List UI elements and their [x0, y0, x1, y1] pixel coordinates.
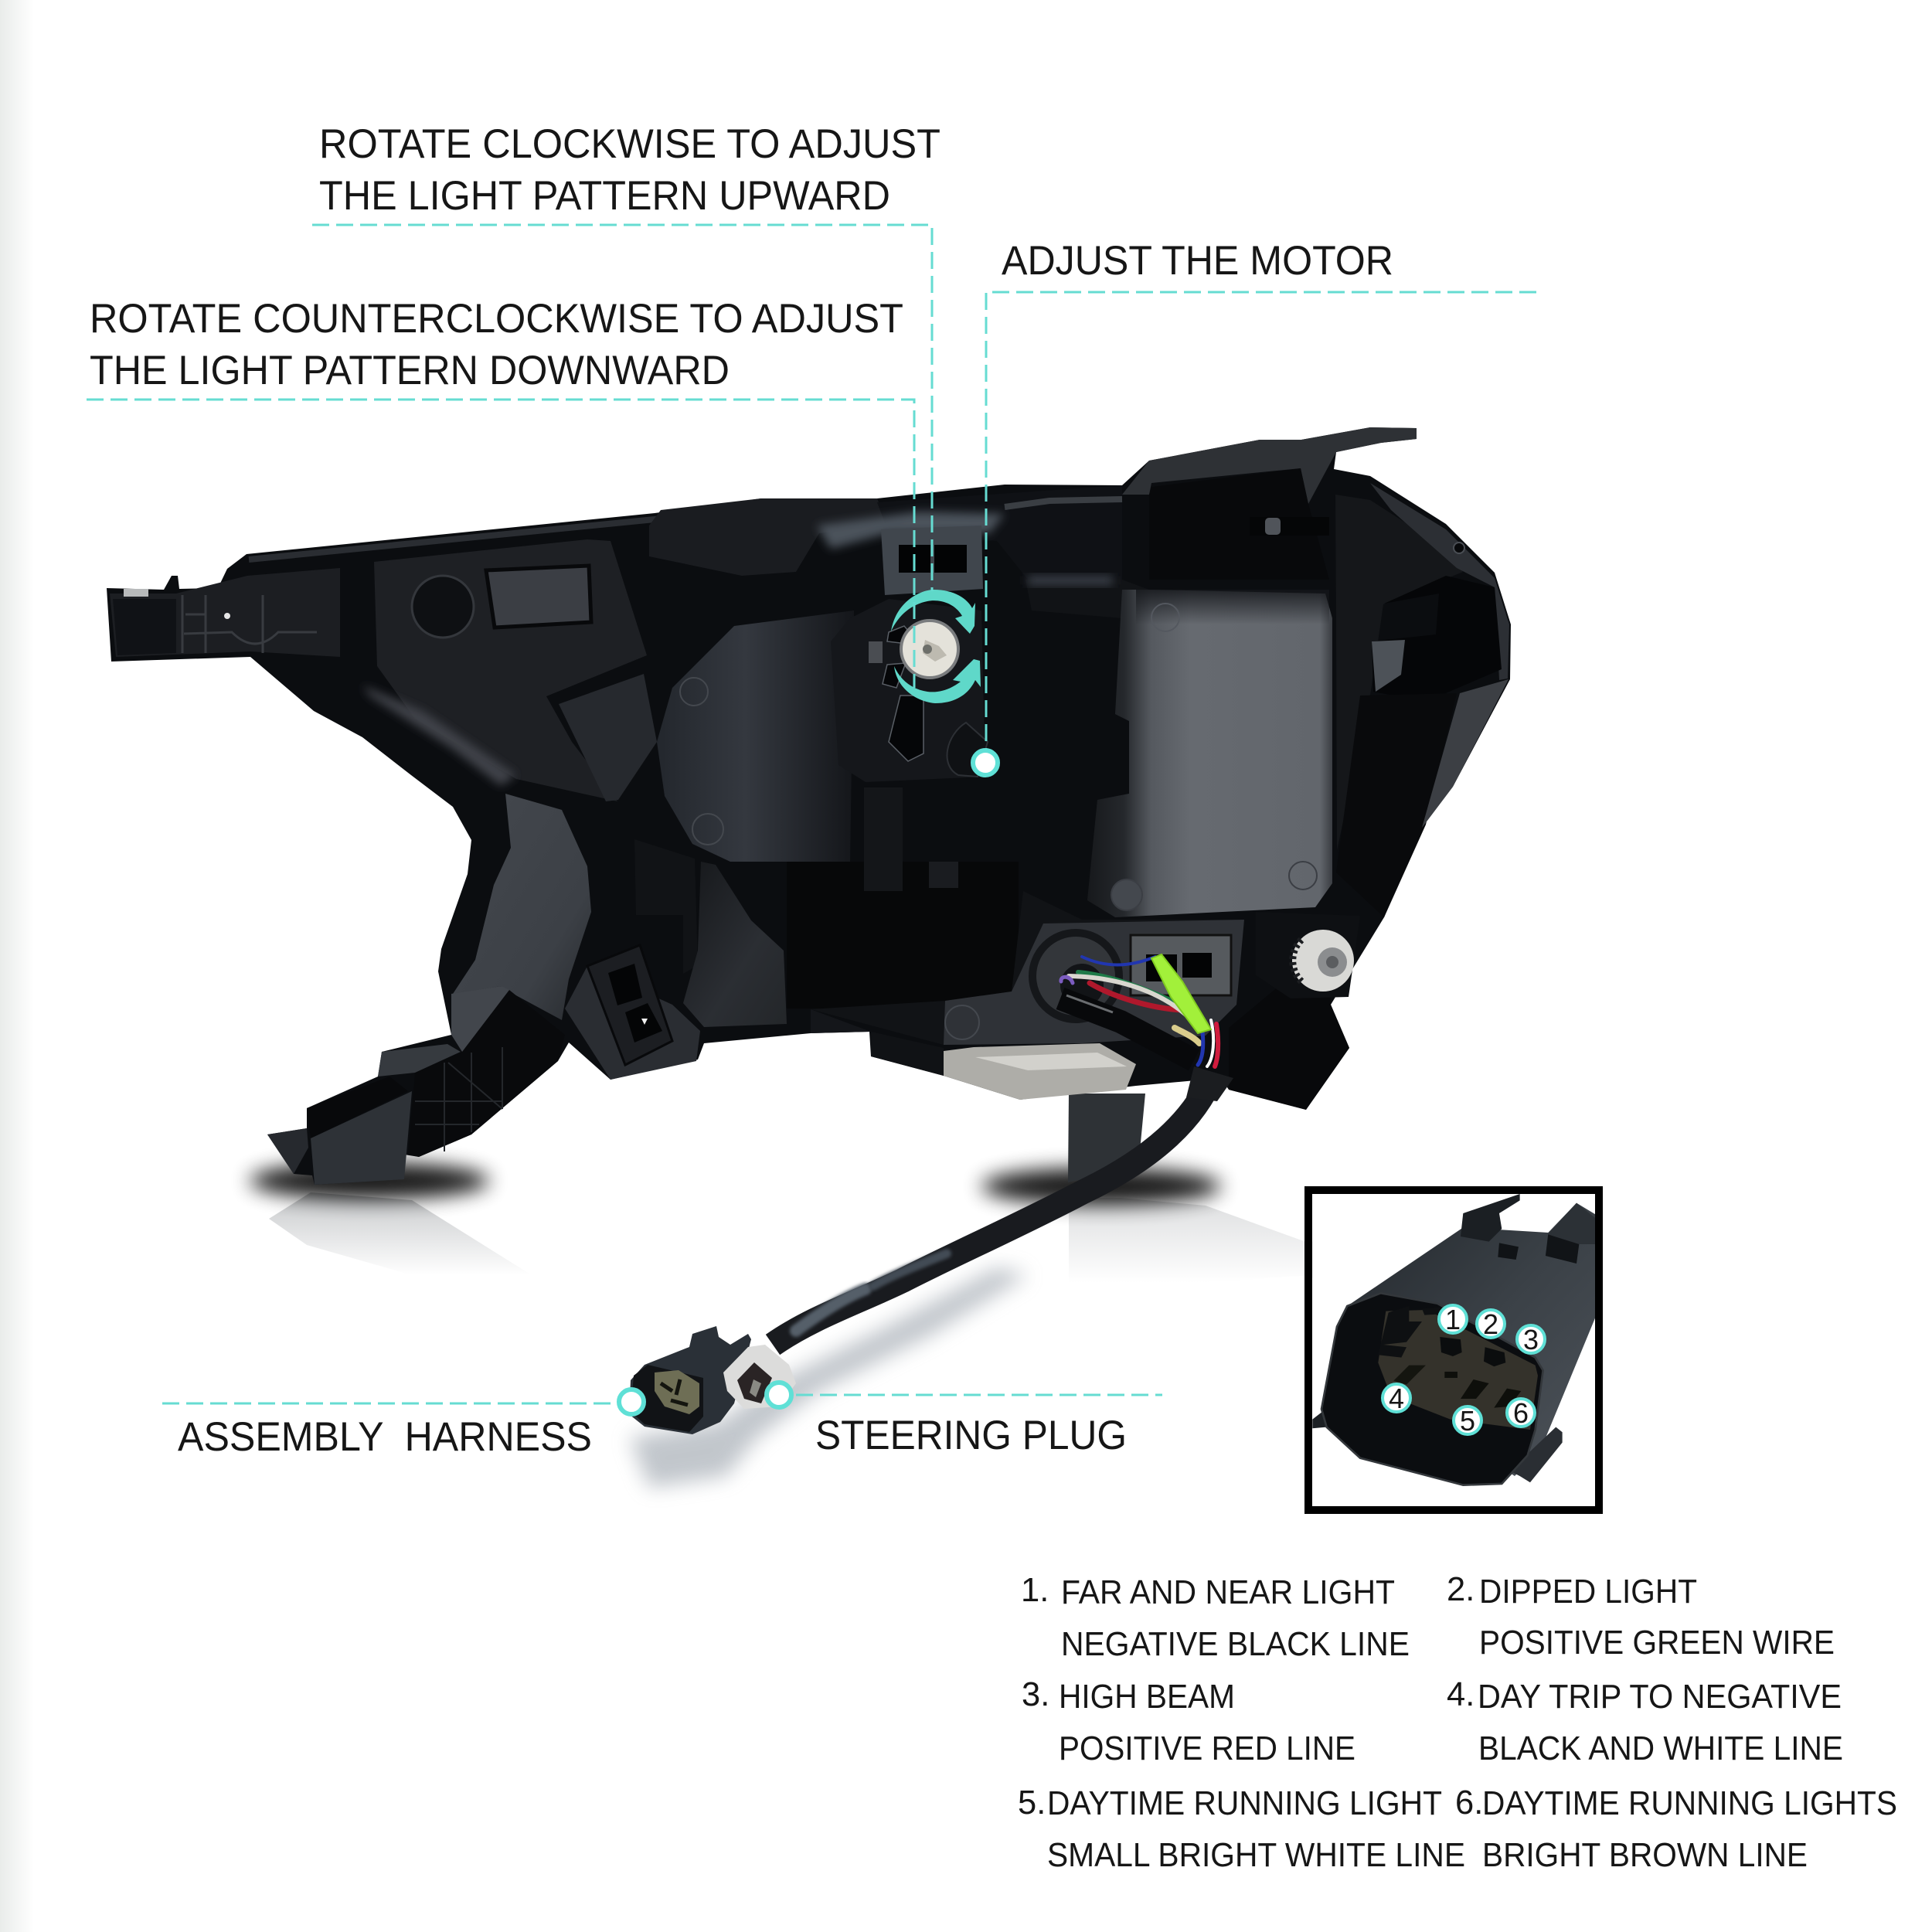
leader: assembly harness [162, 1402, 618, 1405]
pin 3 [1517, 1324, 1545, 1355]
legend item 2: POSITIVE GREEN WIRE [1479, 1624, 1835, 1662]
upper tab cluster [649, 498, 889, 576]
pin 4: 4 [1389, 1383, 1404, 1414]
box top highlight [1028, 576, 1113, 585]
dot: steering plug [767, 1383, 791, 1407]
stem support [1068, 1094, 1145, 1182]
wire harness cable and connector [629, 1066, 1233, 1434]
legend item 5: SMALL BRIGHT WHITE LINE [1047, 1837, 1465, 1874]
headlight rear housing [107, 427, 1511, 1185]
aluminium control module [944, 1043, 1136, 1100]
label: assembly harness: ASSEMBLY HARNESS [178, 1414, 592, 1460]
square socket [1131, 935, 1231, 995]
callout dots [619, 750, 998, 1414]
leader: steering plug [796, 1394, 1162, 1396]
green heat shrink [1151, 954, 1211, 1033]
counterclockwise arrow [894, 659, 981, 703]
leader: counterclockwise [87, 400, 914, 688]
label: rotate clockwise: THE LIGHT PATTERN UPWARD [319, 173, 890, 219]
dot: adjust the motor [973, 750, 998, 775]
leader: adjust the motor [986, 292, 1536, 750]
window bracket base [565, 966, 700, 1080]
harness connector body [629, 1326, 751, 1434]
upper slot window [881, 526, 983, 595]
square recess [486, 566, 591, 628]
legend item 3: POSITIVE RED LINE [1059, 1730, 1355, 1767]
lower left panel [453, 794, 591, 1020]
legend item 3 [1022, 1676, 1355, 1767]
wiring bay [944, 912, 1360, 1100]
pin 6: 6 [1513, 1397, 1529, 1429]
right lower wedge [1336, 693, 1457, 917]
dome section [657, 611, 854, 862]
legend item 1: FAR AND NEAR LIGHT [1061, 1574, 1395, 1611]
mounting bracket [110, 568, 340, 657]
pin 4 [1383, 1383, 1410, 1414]
grommet [1032, 933, 1119, 1019]
legend item 6: 6. [1455, 1784, 1483, 1821]
legend item 2: 2. [1447, 1571, 1475, 1608]
callout leader lines [87, 225, 1536, 1403]
left triangle face [559, 674, 657, 801]
legend item 2: DIPPED LIGHT [1479, 1573, 1697, 1611]
label: steering plug: STEERING PLUG [815, 1413, 1127, 1458]
left panel [374, 539, 647, 801]
lower centre rounded form [683, 862, 787, 1027]
legend item 6 [1455, 1784, 1897, 1874]
steering plug body [723, 1345, 796, 1409]
legend item 1: NEGATIVE BLACK LINE [1061, 1626, 1410, 1663]
rim along top [249, 505, 761, 560]
pin 5 [1454, 1405, 1481, 1437]
dot: assembly harness [619, 1389, 644, 1414]
legend item 2 [1447, 1571, 1835, 1662]
right lower fin [1229, 943, 1349, 1110]
adjustment knob [1256, 912, 1360, 998]
pin 6 [1507, 1397, 1535, 1429]
legend item 1 [1021, 1572, 1410, 1663]
central dark column [787, 862, 1019, 1009]
lower centre bay [634, 839, 698, 974]
pin 1: 1 [1445, 1304, 1461, 1335]
connector body [1312, 1194, 1595, 1486]
inset border [1308, 1190, 1599, 1510]
diagonal edge highlight [362, 685, 516, 786]
lower housing [811, 891, 1236, 1045]
inline black connector [1060, 998, 1194, 1060]
pin 1 [1439, 1304, 1467, 1335]
right housing panel [1335, 495, 1463, 850]
legend item 6: BRIGHT BROWN LINE [1482, 1837, 1808, 1874]
pin 2: 2 [1483, 1308, 1498, 1340]
inset: connector pin photo [1283, 1190, 1602, 1510]
legend item 5: DAYTIME RUNNING LIGHT [1047, 1785, 1442, 1822]
legend item 4: BLACK AND WHITE LINE [1478, 1730, 1843, 1767]
legend item 4 [1447, 1676, 1843, 1767]
pin markers [1383, 1304, 1545, 1437]
foot bracket [267, 986, 565, 1185]
pin legend [1018, 1571, 1897, 1874]
legend item 1: 1. [1021, 1572, 1049, 1609]
top mounting tab [1122, 427, 1417, 504]
adjuster block and bolt [817, 512, 1113, 782]
floor shadows and reflections [250, 1162, 1312, 1488]
legend item 5 [1018, 1784, 1465, 1874]
adjustment rotation arrows [891, 590, 981, 703]
lower black module teeth [811, 1009, 871, 1033]
legend item 4: 4. [1447, 1676, 1475, 1713]
adjuster module [831, 599, 988, 782]
right side vent [1372, 576, 1502, 702]
coloured wires [1061, 957, 1218, 1066]
right grey strip [1422, 679, 1509, 828]
large rear cover [1026, 580, 1332, 917]
cable cuff [1186, 1066, 1233, 1101]
legend item 3: HIGH BEAM [1059, 1679, 1235, 1716]
upper dark bay [877, 485, 1122, 580]
pin 5: 5 [1460, 1405, 1475, 1437]
legend item 3: 3. [1022, 1676, 1049, 1713]
peg under mounting tab [1250, 517, 1329, 536]
label: rotate counterclockwise: ROTATE COUNTERCLOCKWISE TO ADJUST [90, 296, 903, 342]
label: rotate counterclockwise [90, 296, 903, 393]
legend item 4: DAY TRIP TO NEGATIVE [1478, 1679, 1842, 1716]
column side panel [864, 787, 903, 891]
label: adjust the motor: ADJUST THE MOTOR [1002, 238, 1393, 284]
legend item 6: DAYTIME RUNNING LIGHTS [1482, 1785, 1897, 1822]
pin 3: 3 [1523, 1324, 1539, 1355]
label: rotate counterclockwise: THE LIGHT PATTERN DOWNWARD [90, 348, 730, 393]
lens recess circle [412, 576, 474, 638]
housing silhouette [107, 427, 1511, 1185]
motor plug outline [947, 723, 988, 777]
small window bracket [587, 945, 672, 1065]
cable wrinkle highlights [796, 1253, 947, 1331]
adjuster bolt [901, 621, 958, 678]
label: rotate clockwise [319, 121, 940, 219]
clockwise arrow [891, 590, 975, 634]
legend item 5: 5. [1018, 1784, 1046, 1821]
top edge strip [1005, 499, 1122, 507]
label: rotate clockwise: ROTATE CLOCKWISE TO ADJUST [319, 121, 940, 167]
leader: clockwise [312, 225, 932, 591]
pin 2 [1477, 1308, 1505, 1340]
callout labels [90, 121, 1393, 1460]
